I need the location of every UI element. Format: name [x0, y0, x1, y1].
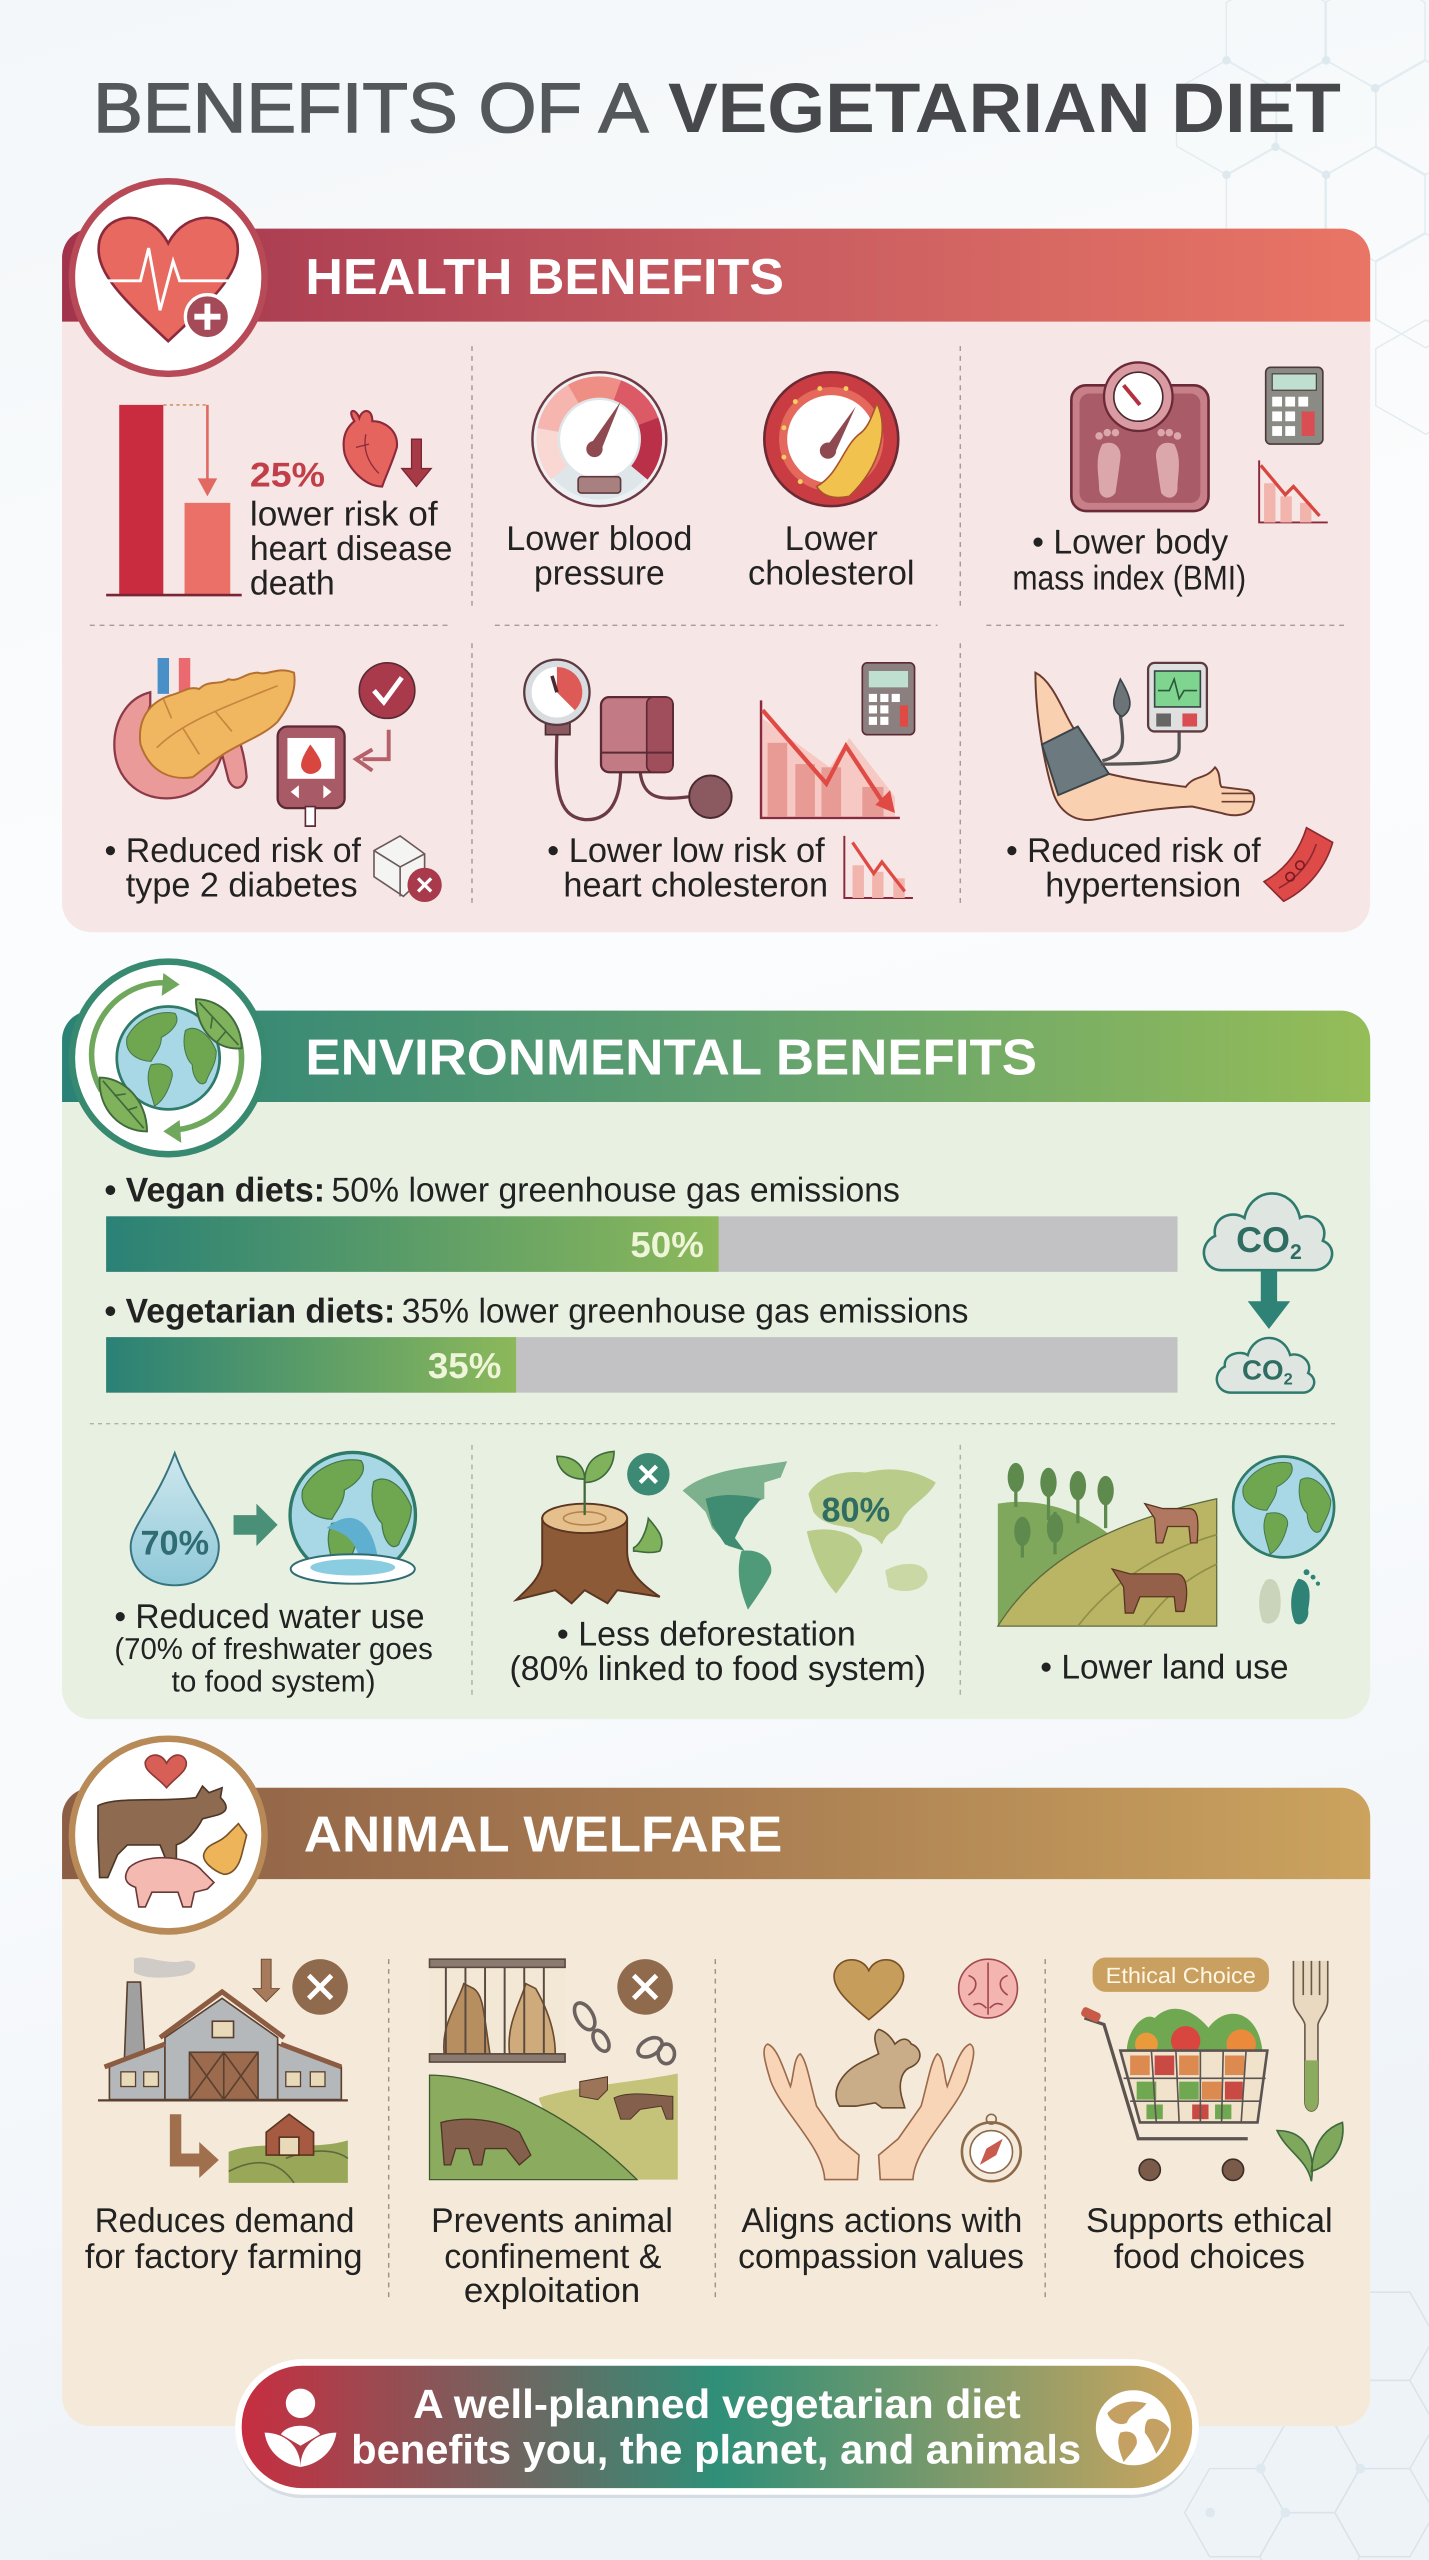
chart: falling cholesterol: [761, 700, 900, 818]
icon: sugar cube: [374, 836, 442, 902]
icon: shopping cart: [1080, 2006, 1267, 2180]
icon: CO2 reduction clouds: 2: [1284, 1371, 1293, 1389]
text: hypertension: hypertension: [1045, 867, 1241, 904]
text: confinement: [431, 2202, 673, 2310]
icon: bathroom scale: [1071, 362, 1209, 511]
text: lower blood pressure: Lower blood: [506, 521, 692, 558]
icon: sphygmomanometer: [524, 660, 732, 820]
text: deforestation: • Less deforestation: [557, 1616, 856, 1654]
text: callout message: [351, 2382, 1081, 2473]
text: land use: • Lower land use: [1040, 1649, 1289, 1687]
text: callout message: benefits you, the planet, and animals: [351, 2428, 1081, 2473]
icon: hands holding rabbit: [764, 2029, 974, 2180]
icon: artery: [1264, 828, 1333, 901]
icon: pasture with animals: [430, 2073, 678, 2180]
icon: factory barn: [98, 1957, 348, 2100]
icon: globe small: [1233, 1456, 1334, 1557]
icon: small chart: [844, 836, 913, 898]
heading: health benefits: HEALTH BENEFITS: [305, 248, 784, 305]
icon: calculator 2: [862, 663, 915, 735]
text: lower blood pressure: pressure: [534, 555, 665, 593]
text: type 2 diabetes: [105, 833, 361, 904]
text: callout message: A well-planned vegetarian diet: [413, 2382, 1022, 2428]
text: heart disease: heart disease: [250, 531, 452, 568]
icon: CO2 reduction clouds: CO: [1236, 1220, 1290, 1260]
text: deforestation: [510, 1616, 926, 1688]
icon: globe with water: [290, 1452, 415, 1584]
text: heart cholesterol: [547, 833, 828, 904]
animal welfare header bar: [62, 1788, 1370, 1879]
icon: falling chart: [1259, 460, 1328, 522]
icon: x badge: [627, 1453, 670, 1496]
icon: broken chain: [570, 2000, 674, 2064]
icon: heart badge: [72, 181, 265, 374]
text: vegan diets: • Vegan diets:: [105, 1172, 325, 1210]
badge: ethical choice: [1093, 1958, 1269, 1992]
icon: compass: [962, 2114, 1021, 2181]
icon: arrow: [234, 1504, 278, 1546]
icon: world map 80%: [683, 1461, 936, 1610]
icon: pancreas: [114, 658, 295, 798]
text: lower cholesterol: Lower: [785, 521, 878, 558]
icon: CO2 reduction clouds: [1204, 1193, 1332, 1393]
text: ethical food: [1086, 2202, 1333, 2276]
text: lower BMI: mass index (BMI): [1013, 560, 1246, 598]
icon: globe with leaves: [72, 962, 265, 1154]
icon: footprints: [1259, 1569, 1320, 1624]
text: compassion: [738, 2202, 1024, 2276]
environmental header bar: [62, 1011, 1370, 1102]
text: confinement: exploitation: [464, 2273, 640, 2310]
icon: water drop 70%: [131, 1453, 219, 1585]
icon: blood pressure gauge: [532, 372, 666, 506]
text: compassion: Aligns actions with: [741, 2202, 1022, 2240]
icon: cage with rabbits: [430, 1959, 565, 2062]
text: confinement: confinement &: [444, 2238, 661, 2276]
bar chart: vegetarian 35%: 35%: [428, 1345, 501, 1386]
icon: x badge 2: [617, 1959, 673, 2015]
text: type 2 diabetes: • Reduced risk of: [105, 833, 361, 870]
icon: arrow to meter: [356, 730, 389, 771]
icon: person with leaf: [265, 2389, 336, 2467]
text: heart cholesterol: • Lower low risk of: [547, 833, 825, 870]
icon: CO2 reduction clouds: CO: [1242, 1355, 1284, 1386]
icon: farmland with cows: [998, 1463, 1217, 1626]
text: vegetarian diets: • Vegetarian diets:: [105, 1293, 395, 1331]
bar chart: vegan 50%: 50%: [630, 1224, 704, 1265]
icon: leaves: [1277, 2122, 1343, 2181]
text: water use: (70% of freshwater goes: [114, 1631, 433, 1665]
text: water use: • Reduced water use: [114, 1598, 425, 1636]
bar chart: vegan 50%: [106, 1216, 1177, 1272]
text: water use: [114, 1598, 433, 1698]
icon: check badge: [359, 663, 415, 718]
icon: brain: [959, 1959, 1017, 2018]
text: hypertension: • Reduced risk of: [1006, 833, 1261, 870]
icon: down arrow with x badge: [253, 1959, 348, 2015]
title: [93, 70, 1341, 149]
text: lower cholesterol: [748, 521, 915, 593]
heading: animal welfare: ANIMAL WELFARE: [304, 1806, 782, 1863]
panel: environmental benefits: [62, 962, 1370, 1719]
text: type 2 diabetes: type 2 diabetes: [126, 867, 358, 904]
icon: artery cholesterol gauge: [764, 372, 898, 506]
callout: footer banner: [237, 2362, 1197, 2498]
icon: farm animals: [72, 1739, 265, 1931]
icon: fork: [1293, 1961, 1328, 2111]
title: BENEFITS OF A: [93, 70, 649, 149]
panel: animal welfare: [62, 1739, 1370, 2426]
text: heart disease: [250, 496, 452, 602]
text: heart cholesterol: heart cholesteron: [563, 867, 828, 904]
text: lower BMI: • Lower body: [1032, 524, 1229, 562]
text: confinement: Prevents animal: [431, 2202, 673, 2240]
text: vegetarian diets: 35% lower greenhouse gas emissions: [402, 1293, 968, 1331]
icon: heart tan: [834, 1960, 904, 2020]
heading: environmental benefits: ENVIRONMENTAL BENEFITS: [305, 1029, 1037, 1086]
text: water use: to food system): [171, 1664, 376, 1698]
text: deforestation: (80% linked to food system): [510, 1651, 926, 1688]
text: vegan diets: 50% lower greenhouse gas emissions: [332, 1172, 900, 1210]
text: compassion: compassion values: [738, 2238, 1024, 2276]
icon: small farm: [229, 2114, 348, 2183]
text: factory farming: [85, 2202, 363, 2276]
badge: ethical choice: Ethical Choice: [1106, 1963, 1256, 1988]
title: VEGETARIAN DIET: [668, 70, 1341, 149]
icon: anatomical heart with arrow: [344, 411, 431, 487]
health header bar: [62, 229, 1370, 322]
text: factory farming: Reduces demand: [95, 2202, 354, 2240]
text: ethical food: Supports ethical: [1086, 2202, 1333, 2240]
icon: calculator: [1266, 367, 1323, 444]
text: lower cholesterol: cholesterol: [748, 555, 915, 593]
stat: 25%: 25%: [250, 457, 326, 495]
icon: CO2 reduction clouds: 2: [1290, 1239, 1302, 1264]
panel: health benefits: [62, 181, 1370, 932]
text: ethical food: food choices: [1114, 2238, 1305, 2276]
icon: white globe: [1096, 2390, 1171, 2465]
icon: arm with monitor: [1035, 663, 1254, 820]
icon: water drop 70%: 70%: [140, 1525, 210, 1562]
icon: arrow to small farm: [170, 2114, 219, 2178]
chart: heart disease bars: [106, 405, 242, 595]
text: heart disease: death: [250, 565, 335, 602]
text: lower BMI: [1013, 524, 1246, 598]
text: vegetarian diets: [105, 1293, 968, 1331]
text: lower blood pressure: [506, 521, 692, 593]
text: heart disease: lower risk of: [250, 496, 438, 534]
icon: world map 80%: 80%: [821, 1492, 891, 1530]
bar chart: vegetarian 35%: [106, 1337, 1177, 1393]
icon: glucose meter: [278, 727, 345, 826]
icon: tree stump with sprout: [516, 1451, 662, 1603]
text: hypertension: [1006, 833, 1261, 904]
text: factory farming: for factory farming: [85, 2238, 363, 2276]
